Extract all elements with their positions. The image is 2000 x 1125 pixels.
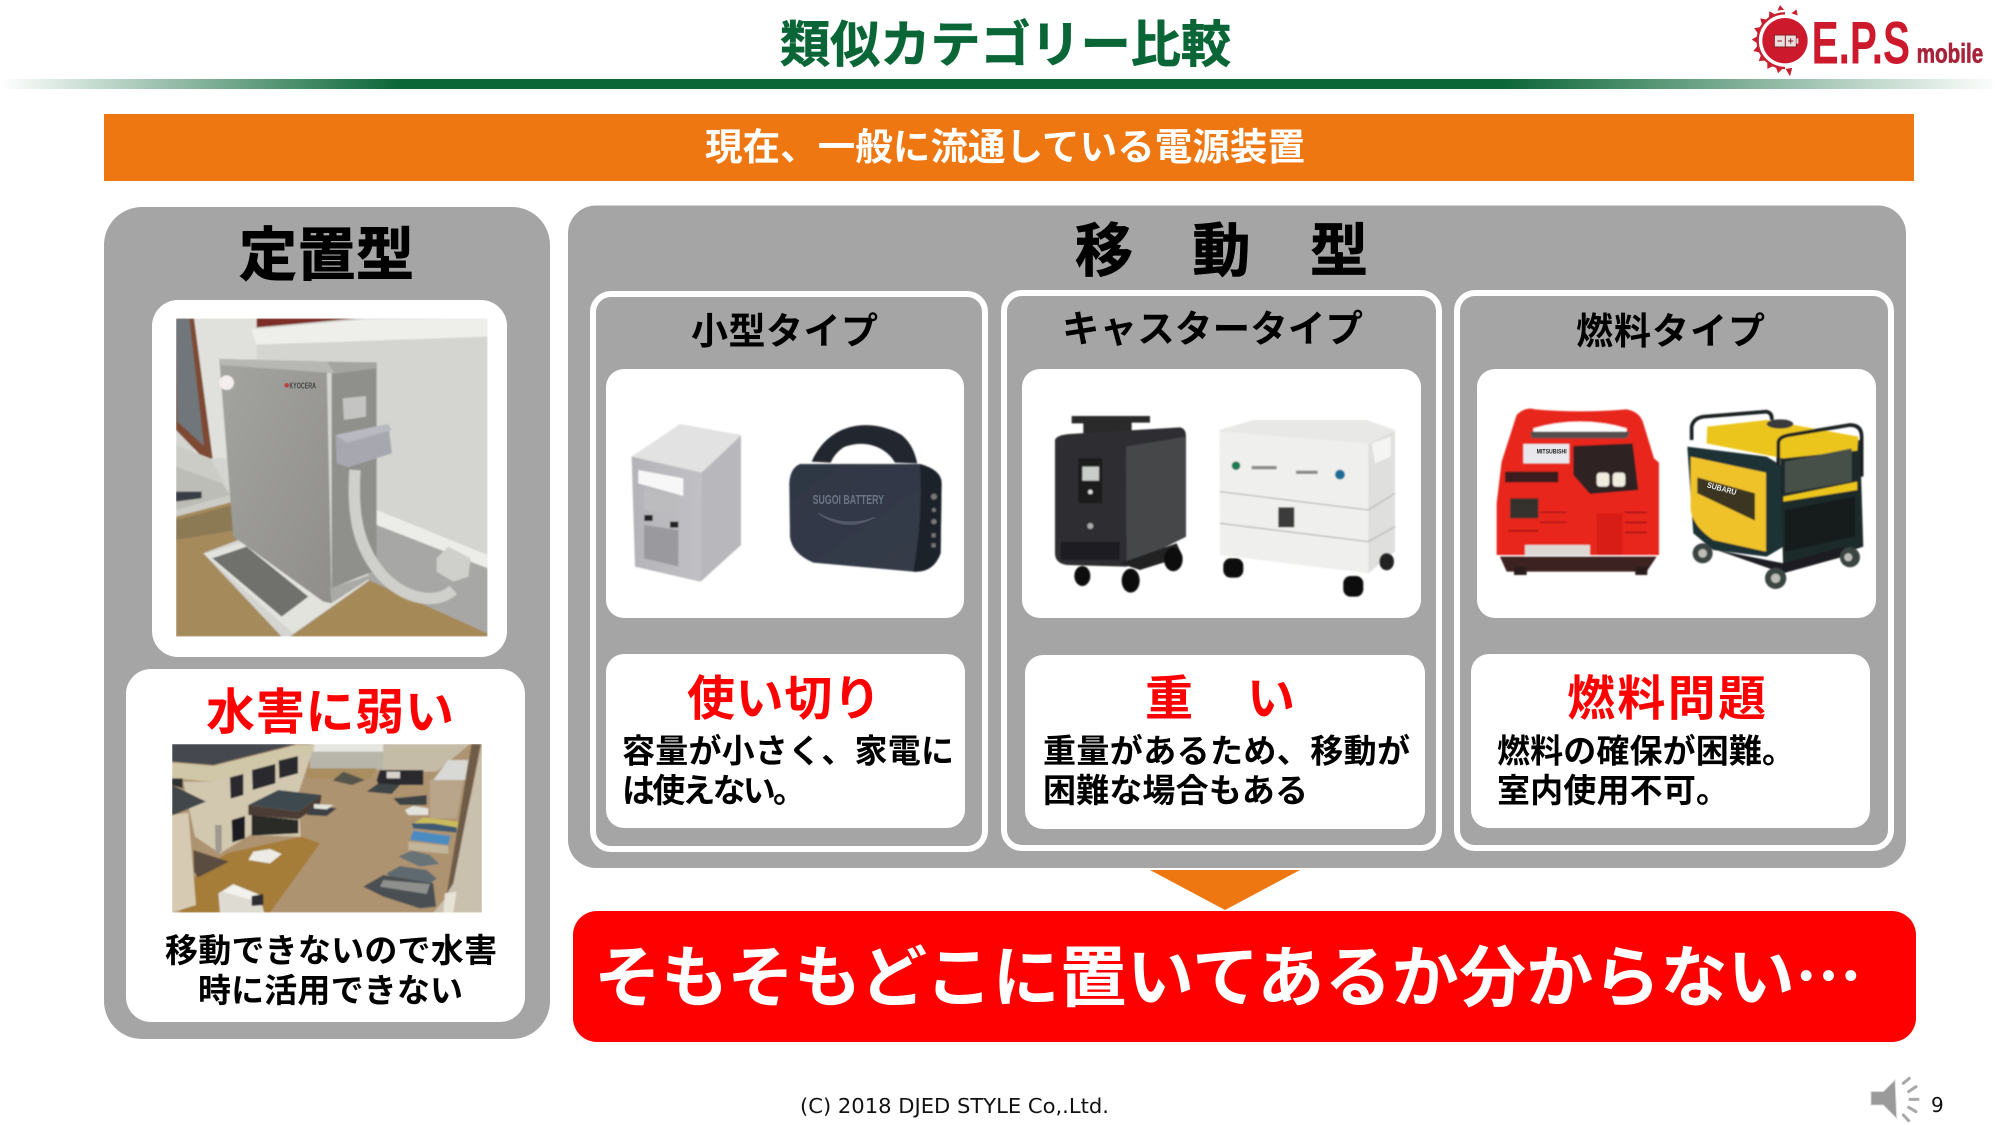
panel: portable type bbox=[568, 206, 1906, 868]
problem description bbox=[1043, 732, 1410, 809]
problem description bbox=[1497, 732, 1795, 809]
products: black and white caster batteries bbox=[1055, 416, 1395, 597]
page number: 9 bbox=[1931, 1093, 1944, 1117]
arrow: down triangle bbox=[1150, 870, 1300, 910]
flood description: 移動できないので水害 bbox=[165, 932, 497, 969]
product card bbox=[1022, 369, 1421, 618]
flood description bbox=[165, 932, 497, 1009]
logo: E.P.S mobile: mobile bbox=[1917, 39, 1983, 69]
product card bbox=[1477, 369, 1876, 618]
problem heading: 重 い bbox=[1145, 673, 1295, 726]
problem description: 重量があるため、移動が bbox=[1043, 732, 1410, 770]
logo: E.P.S mobile: E.P.S bbox=[1812, 8, 1910, 76]
card: weak to flood damage bbox=[126, 669, 525, 1022]
column: caster type bbox=[1004, 293, 1439, 848]
column heading: 小型タイプ bbox=[691, 311, 878, 352]
flood description: 時に活用できない bbox=[198, 972, 463, 1009]
problem card bbox=[1471, 654, 1870, 828]
title: 類似カテゴリー比較 bbox=[780, 17, 1231, 73]
products: red and yellow generators: SUBARU bbox=[1706, 481, 1738, 497]
title underline bar bbox=[0, 79, 2000, 89]
flood heading: 水害に弱い bbox=[206, 686, 454, 740]
photo: wall-mounted battery unit: KYOCERA bbox=[289, 381, 316, 390]
problem heading: 使い切り bbox=[687, 673, 881, 726]
conclusion banner: そもそもどこに置いてあるか分からない… bbox=[594, 924, 1862, 1021]
column: compact type bbox=[593, 294, 985, 849]
products: silver box and navy battery case bbox=[632, 424, 942, 582]
panel: stationary type bbox=[104, 207, 550, 1039]
heading: portable: 移 動 型 bbox=[1075, 219, 1368, 284]
logo: E.P.S mobile bbox=[1752, 5, 1983, 77]
heading: stationary: 定置型 bbox=[239, 223, 414, 288]
products: red and yellow generators: MITSUBISHI bbox=[1537, 449, 1567, 455]
column: fuel type bbox=[1457, 293, 1891, 848]
orange header banner: 現在、一般に流通している電源装置 bbox=[705, 126, 1305, 168]
photo: flooded street bbox=[172, 744, 482, 913]
problem description: 困難な場合もある bbox=[1043, 772, 1308, 809]
product card bbox=[606, 369, 964, 618]
column heading: キャスタータイプ bbox=[1062, 308, 1363, 350]
icon: speaker bbox=[1871, 1078, 1918, 1121]
photo: wall-mounted battery unit bbox=[176, 318, 488, 637]
problem card bbox=[606, 654, 965, 828]
problem description bbox=[622, 732, 954, 809]
column heading: 燃料タイプ bbox=[1576, 311, 1765, 352]
problem description: 燃料の確保が困難。 bbox=[1497, 732, 1795, 770]
photo card: home battery bbox=[152, 300, 507, 657]
conclusion banner bbox=[573, 911, 1916, 1042]
footer copyright: (C) 2018 DJED STYLE Co,.Ltd. bbox=[800, 1094, 1109, 1118]
orange header banner bbox=[104, 114, 1914, 181]
products: silver box and navy battery case: SUGOI BATTERY bbox=[813, 492, 884, 507]
problem description: は使えない。 bbox=[622, 772, 806, 809]
problem description: 容量が小さく、家電に bbox=[622, 732, 954, 770]
problem description: 室内使用不可。 bbox=[1497, 772, 1729, 809]
products: red and yellow generators bbox=[1497, 409, 1863, 589]
problem card bbox=[1025, 655, 1425, 829]
problem heading: 燃料問題 bbox=[1567, 673, 1766, 726]
